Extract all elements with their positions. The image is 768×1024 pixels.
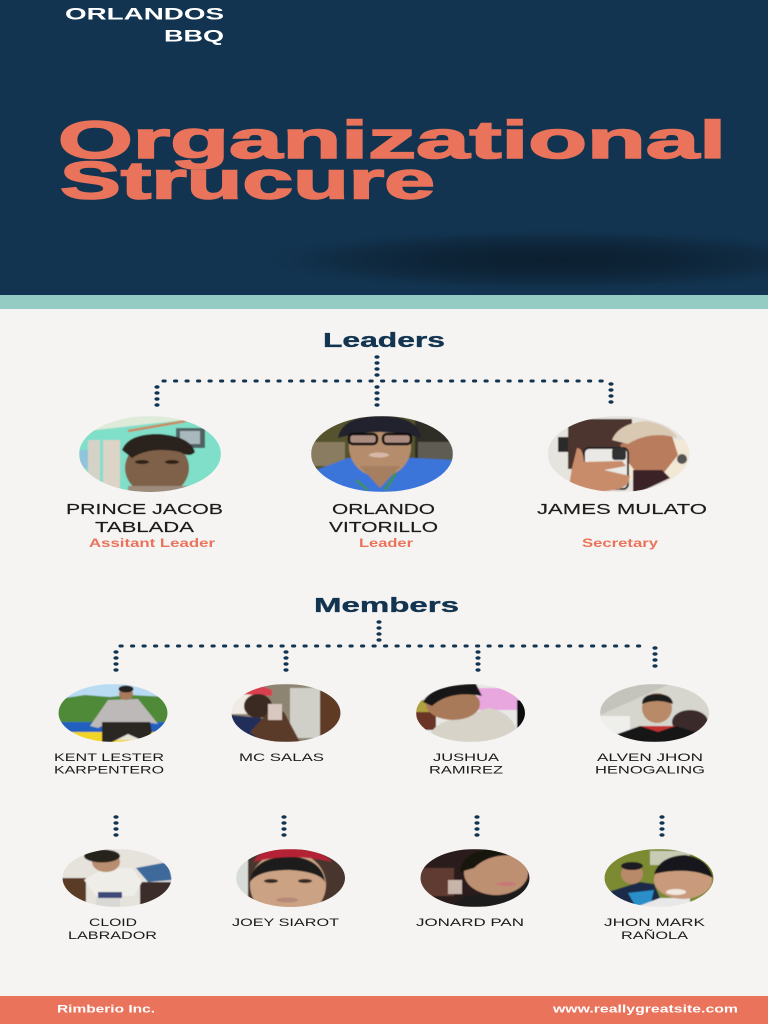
- name: TABLADA: [95, 520, 194, 536]
- member: Alven Jhon Henogaling: [595, 684, 710, 776]
- footer: [0, 996, 768, 1024]
- name: MC SALAS: [239, 752, 324, 764]
- name: CLOID: [89, 917, 137, 929]
- name: VITORILLO: [329, 520, 438, 536]
- role: Secretary: [582, 536, 658, 550]
- photo: Jonard Pan: [420, 849, 530, 907]
- name: [54, 752, 165, 776]
- header panel: [0, 0, 768, 309]
- name: [604, 917, 706, 942]
- footer: company: Rimberio Inc.: [57, 1004, 155, 1016]
- photo: Alven Jhon Henogaling: [600, 684, 710, 742]
- member: Mc Salas: [231, 684, 341, 764]
- leader: Prince Jacob Tablada: [66, 416, 223, 550]
- photo: Jhon Mark Rañola: [604, 849, 714, 907]
- name: [68, 917, 157, 942]
- name: KARPENTERO: [54, 764, 165, 776]
- member: Jushua Ramirez: [416, 684, 526, 776]
- photo: James Mulato: [548, 416, 690, 492]
- title: Strucure: [60, 152, 435, 210]
- company name: ORLANDOS: [65, 6, 224, 24]
- company name: [65, 6, 224, 46]
- name: [429, 752, 503, 776]
- photo: Kent Lester Karpentero: [58, 684, 168, 742]
- name: RAÑOLA: [621, 929, 689, 942]
- member: Cloid Labrador: [62, 849, 172, 942]
- title: [58, 111, 726, 210]
- connectors: second member row: [113, 815, 665, 837]
- member: Jhon Mark Rañola: [604, 849, 714, 942]
- name: PRINCE JACOB: [66, 502, 223, 518]
- name: [595, 752, 705, 776]
- name: [329, 502, 438, 536]
- footer: website: www.reallygreatsite.com: [552, 1004, 738, 1016]
- leader: Orlando Vitorillo: [311, 416, 453, 550]
- name: JOEY SIAROT: [232, 917, 339, 929]
- photo: Orlando Vitorillo: [311, 416, 453, 492]
- name: JHON MARK: [604, 917, 706, 929]
- role: Leader: [359, 536, 413, 550]
- leader: James Mulato: [537, 416, 707, 550]
- photo: Cloid Labrador: [62, 849, 172, 907]
- member: Kent Lester Karpentero: [54, 684, 168, 776]
- name: JONARD PAN: [416, 917, 524, 929]
- connector: leaders: [154, 355, 614, 407]
- member: Jonard Pan: [416, 849, 530, 929]
- title: Organizational: [58, 111, 726, 170]
- name: ORLANDO: [332, 502, 435, 518]
- name: JAMES MULATO: [537, 502, 707, 518]
- name: ALVEN JHON: [597, 752, 703, 764]
- company name: BBQ: [164, 28, 224, 46]
- name: [66, 502, 223, 536]
- heading: leaders: Leaders: [323, 330, 445, 352]
- name: LABRADOR: [68, 930, 157, 942]
- photo: Jushua Ramirez: [416, 684, 526, 742]
- photo: Mc Salas: [231, 684, 341, 742]
- member: Joey Siarot: [232, 849, 346, 929]
- heading: members: Members: [314, 595, 459, 617]
- role: Assitant Leader: [89, 536, 215, 550]
- name: JUSHUA: [433, 752, 500, 764]
- connector: members: [113, 620, 658, 672]
- name: RAMIREZ: [429, 764, 503, 776]
- name: HENOGALING: [595, 764, 705, 776]
- name: KENT LESTER: [54, 752, 164, 764]
- photo: Joey Siarot: [236, 849, 345, 907]
- photo: Prince Jacob Tablada: [79, 416, 221, 496]
